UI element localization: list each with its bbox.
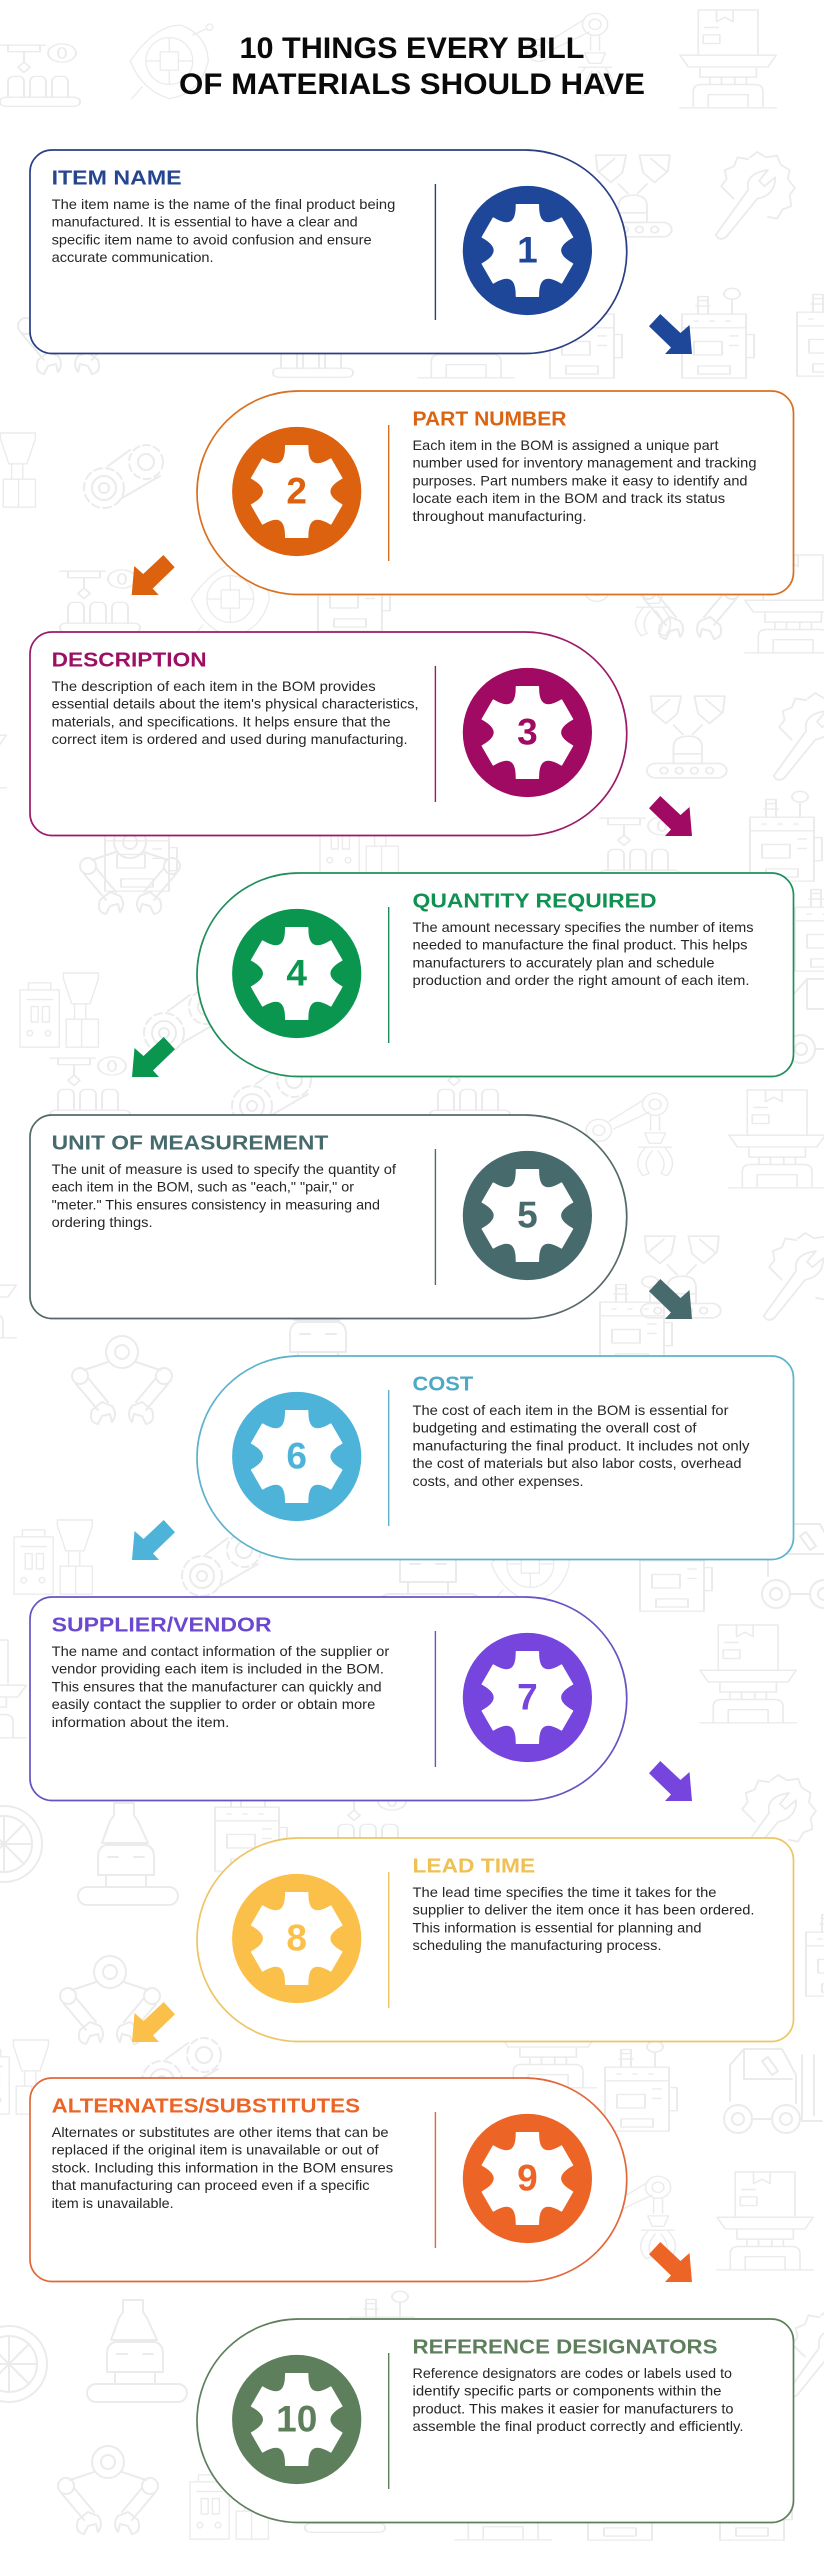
panel: unit of measurement (30, 1115, 627, 1318)
text block: lead time: supplier to deliver the item once it has been ordered. (412, 1902, 754, 1918)
icon: gear 9: 9 (517, 2158, 538, 2198)
arrow 4 (132, 1037, 175, 1077)
panel: item name (30, 150, 627, 354)
arrow 8 (132, 2002, 175, 2042)
icon: gear 8: 8 (286, 1918, 307, 1958)
icon: gear 4: 4 (286, 952, 307, 994)
text block: supplier/vendor (52, 1643, 390, 1730)
text block: supplier/vendor: information about the item. (52, 1714, 229, 1730)
heading: item name: ITEM NAME (52, 168, 182, 190)
arrow 6 (132, 1520, 175, 1560)
icon: gear 7 (463, 1633, 592, 1762)
heading: part number: PART NUMBER (412, 409, 567, 431)
text block: quantity required: production and order the right amount of each item. (412, 972, 750, 988)
text block: quantity required: The amount necessary specifies the number of items (412, 919, 754, 935)
arrow 1 (649, 314, 692, 354)
text block: part number: throughout manufacturing. (412, 508, 586, 524)
panel: supplier/vendor (30, 1597, 627, 1800)
text block: alternates/substitutes (52, 2124, 393, 2211)
text block: supplier/vendor: easily contact the supplier to order or obtain more (52, 1696, 376, 1712)
panel: lead time (197, 1838, 794, 2042)
panel: reference designators (197, 2319, 794, 2522)
text block: cost: manufacturing the final product. It includes not only (412, 1437, 750, 1453)
text block: item name: The item name is the name of the final product being (52, 196, 395, 212)
text block: description: The description of each item in the BOM provides (52, 678, 376, 694)
arrow 9 (649, 2242, 692, 2282)
text block: lead time: This information is essential for planning and (412, 1919, 702, 1935)
icon: gear 8 (232, 1874, 361, 2003)
text block: quantity required (412, 919, 754, 988)
icon: gear 2: 2 (286, 470, 307, 512)
icon: gear 6 (232, 1392, 361, 1521)
icon: gear 1: 1 (517, 230, 538, 270)
text block: cost: The cost of each item in the BOM is essential for (412, 1402, 729, 1418)
text block: part number: purposes. Part numbers make it easy to identify and (412, 472, 748, 488)
heading: unit of measurement: UNIT OF MEASUREMENT (52, 1133, 328, 1155)
heading: cost: COST (412, 1374, 473, 1396)
arrow 7 (649, 1761, 692, 1801)
text block: quantity required: needed to manufacture the final product. This helps (412, 937, 748, 953)
text block: description (52, 678, 419, 747)
text block: alternates/substitutes: item is unavailable. (52, 2195, 174, 2211)
heading: lead time: LEAD TIME (412, 1856, 535, 1878)
icon: gear 10 (232, 2355, 361, 2484)
icon: gear 5: 5 (517, 1194, 538, 1236)
text block: description: materials, and specifications. It helps ensure that the (52, 713, 391, 729)
text block: supplier/vendor: This ensures that the manufacturer can quickly and (52, 1678, 382, 1694)
text block: item name: specific item name to avoid confusion and ensure (52, 231, 372, 247)
text block: unit of measurement: The unit of measure is used to specify the quantity of (52, 1161, 396, 1177)
text block: lead time: scheduling the manufacturing process. (412, 1937, 662, 1953)
text block: unit of measurement: ordering things. (52, 1214, 153, 1230)
text block: alternates/substitutes: that manufacturing can proceed even if a specific (52, 2177, 370, 2193)
text block: description: correct item is ordered and used during manufacturing. (52, 731, 408, 747)
text block: lead time (412, 1884, 754, 1953)
icon: gear 3 (463, 668, 592, 797)
text block: part number: number used for inventory management and tracking (412, 455, 756, 471)
arrow 3 (649, 796, 692, 836)
arrow 2 (132, 555, 175, 595)
heading: description: DESCRIPTION (52, 650, 207, 672)
text block: reference designators: identify specific parts or components within the (412, 2383, 722, 2399)
text block: cost: costs, and other expenses. (412, 1473, 584, 1489)
text block: reference designators: assemble the final product correctly and efficiently. (412, 2418, 744, 2434)
text block: quantity required: manufacturers to accurately plan and schedule (412, 954, 715, 970)
icon: gear 5 (463, 1151, 592, 1280)
icon: gear 6: 6 (286, 1436, 307, 1476)
text block: supplier/vendor: vendor providing each item is included in the BOM. (52, 1661, 384, 1677)
heading: reference designators: REFERENCE DESIGNATORS (412, 2337, 718, 2359)
text block: unit of measurement: each item in the BOM, such as "each," "pair," or (52, 1179, 354, 1195)
text block: item name: accurate communication. (52, 249, 214, 265)
arrow 5 (649, 1279, 692, 1319)
text block: cost: budgeting and estimating the overall cost of (412, 1420, 697, 1436)
text block: cost: the cost of materials but also labor costs, overhead (412, 1455, 742, 1471)
text block: reference designators: product. This makes it easier for manufacturers to (412, 2400, 734, 2416)
icon: gear 9 (463, 2114, 592, 2243)
icon: gear 2 (232, 427, 361, 556)
icon: gear 3: 3 (517, 712, 538, 752)
text block: item name: manufactured. It is essential to have a clear and (52, 214, 358, 230)
title (179, 32, 645, 101)
panel: cost (197, 1356, 794, 1560)
text block: part number: Each item in the BOM is assigned a unique part (412, 437, 719, 453)
text block: part number: locate each item in the BOM and track its status (412, 490, 725, 506)
text block: supplier/vendor: The name and contact information of the supplier or (52, 1643, 390, 1659)
title: OF MATERIALS SHOULD HAVE (179, 68, 645, 101)
heading: supplier/vendor: SUPPLIER/VENDOR (52, 1615, 272, 1637)
text block: alternates/substitutes: replaced if the original item is unavailable or out of (52, 2142, 379, 2158)
panel: alternates/substitutes (30, 2078, 627, 2282)
text block: unit of measurement: "meter." This ensures consistency in measuring and (52, 1196, 380, 1212)
text block: alternates/substitutes: Alternates or substitutes are other items that can be (52, 2124, 389, 2140)
text block: part number (412, 437, 756, 524)
heading: quantity required: QUANTITY REQUIRED (412, 891, 656, 913)
text block: unit of measurement (52, 1161, 396, 1230)
text block: description: essential details about the item's physical characteristics, (52, 696, 419, 712)
panel: quantity required (197, 873, 794, 1076)
icon: gear 4 (232, 909, 361, 1038)
title: 10 THINGS EVERY BILL (240, 32, 584, 65)
panel: description (30, 632, 627, 836)
icon: gear 1 (463, 186, 592, 315)
text block: alternates/substitutes: stock. Including this information in the BOM ensures (52, 2159, 393, 2175)
heading: alternates/substitutes: ALTERNATES/SUBSTITUTES (52, 2096, 360, 2118)
text block: cost (412, 1402, 750, 1489)
icon: gear 10: 10 (276, 2398, 317, 2440)
text block: item name (52, 196, 395, 265)
text block: reference designators (412, 2365, 744, 2434)
icon: gear 7: 7 (517, 1676, 538, 1718)
text block: reference designators: Reference designators are codes or labels used to (412, 2365, 732, 2381)
text block: lead time: The lead time specifies the time it takes for the (412, 1884, 717, 1900)
panel: part number (197, 391, 794, 594)
